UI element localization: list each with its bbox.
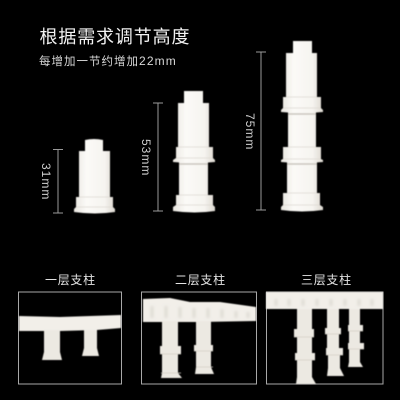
grid beam and two-tier posts — [143, 298, 256, 378]
title: 根据需求调节高度 — [40, 27, 190, 47]
post: one tier — [74, 139, 115, 214]
dimension: 75mm: 75mm — [243, 113, 257, 150]
dimension: 75mm — [243, 52, 266, 210]
grid beam and three-tier posts — [266, 292, 383, 384]
panel: two-tier support — [142, 272, 256, 384]
post: three tiers — [281, 41, 323, 212]
panel label: 二层支柱 — [175, 272, 226, 287]
subtitle: 每增加一节约增加22mm — [39, 54, 177, 68]
grid beam and short posts — [19, 315, 121, 360]
panel label: 三层支柱 — [301, 272, 352, 287]
dimension: 31mm — [39, 150, 63, 213]
panel: one-tier support — [18, 272, 122, 384]
panel frame — [142, 292, 256, 384]
dimension: 53mm — [139, 103, 163, 211]
dimension: 31mm: 31mm — [39, 163, 53, 200]
panel frame — [18, 292, 122, 384]
post: two tiers — [173, 91, 215, 212]
panel label: 一层支柱 — [45, 272, 96, 287]
dimension: 53mm: 53mm — [139, 139, 153, 176]
panel: three-tier support — [266, 272, 383, 384]
panel frame — [266, 292, 383, 384]
